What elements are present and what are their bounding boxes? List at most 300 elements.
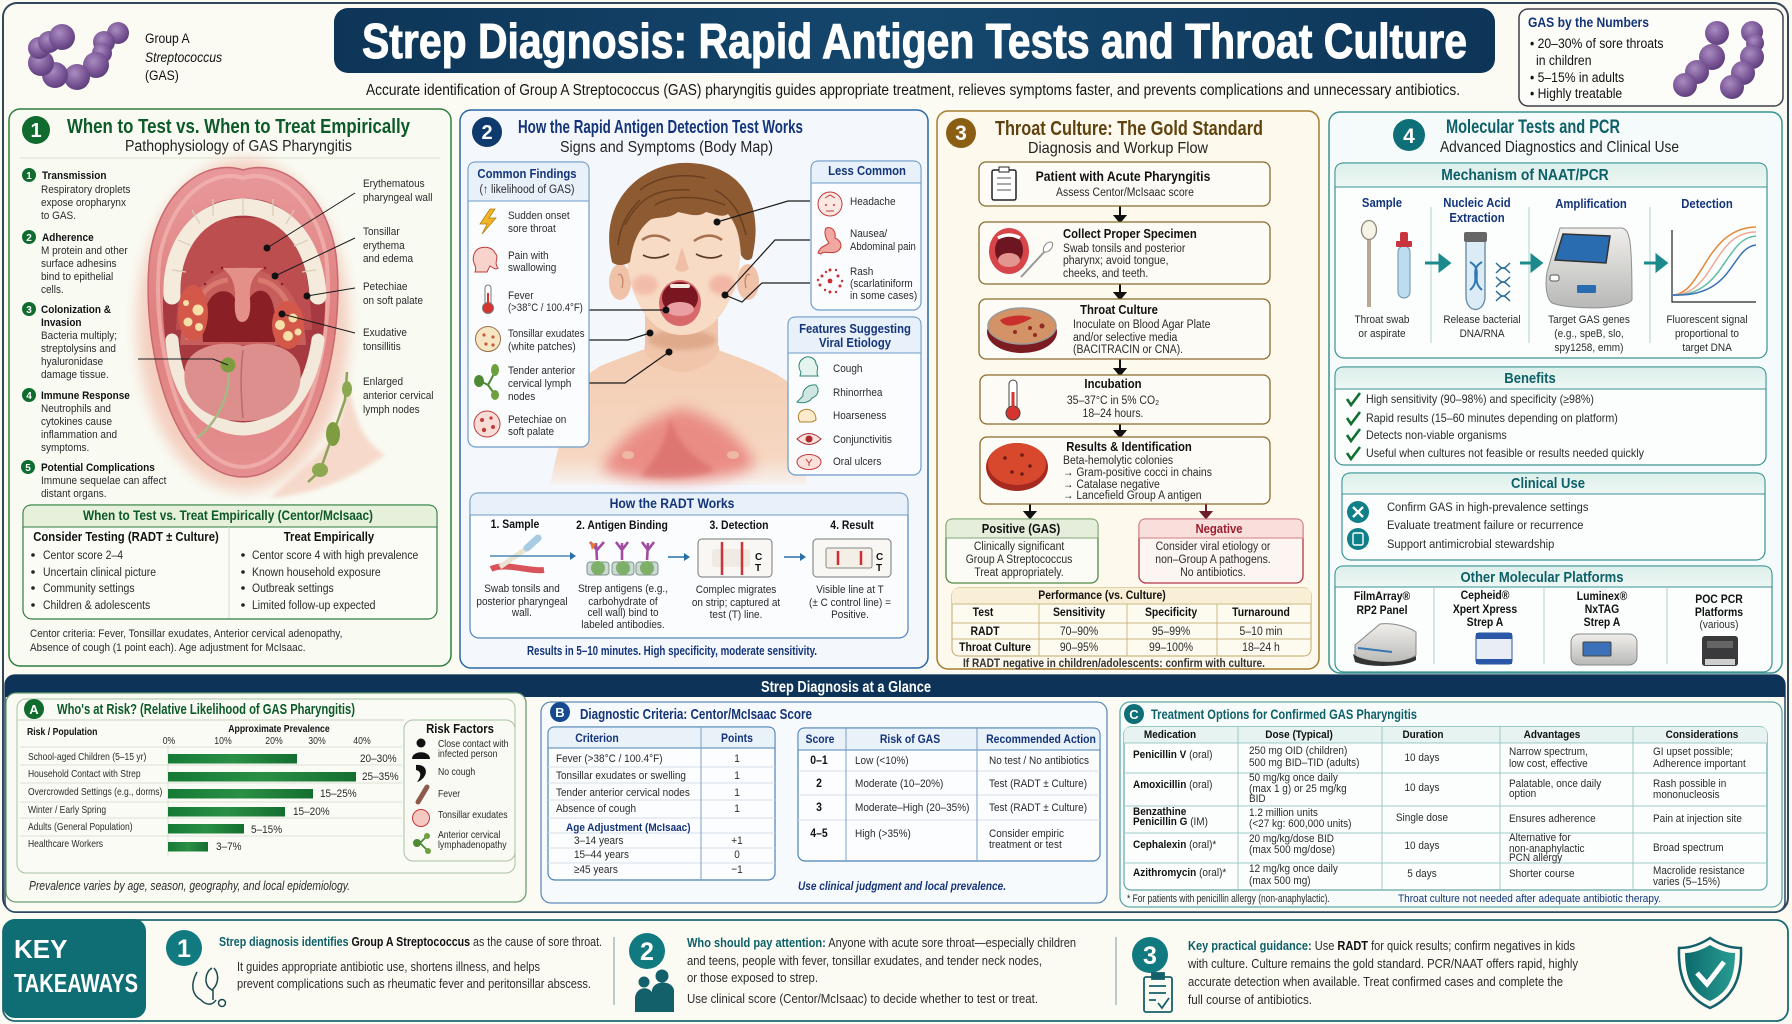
text: pathophysiology steps: 3 [26,305,32,316]
column headers: Detection [1681,196,1733,211]
flow step: specimen: Swab tonsils and posterior [1063,242,1186,255]
table: performance vs culture: Turnaround [1232,606,1290,619]
platform names: Cepheid® [1461,589,1510,602]
table: performance vs culture: 99–100% [1149,641,1193,654]
text: viral features list: Cough [833,362,862,375]
table: Centor criteria: Absence of cough [556,802,636,815]
text: step captions: posterior pharyngeal [476,595,568,608]
box: benefits: Benefits [1504,369,1556,386]
box: test vs treat: Community settings [43,582,135,595]
takeaway 1 [166,930,602,1006]
text: less common list: in some cases) [850,289,917,302]
text: pathophysiology steps: Adherence [42,231,94,244]
chart: prevalence bars: Adults (General Population) [28,821,133,832]
table: Centor criteria: 1 [734,802,740,815]
table: treatments: (<27 kg: 600,000 units) [1249,817,1351,830]
box: features suggesting viral etiology: Features Suggesting [799,321,911,336]
result box: negative: Negative [1195,521,1243,536]
text: common findings list: Sudden onset [508,209,570,222]
platform names: Platforms [1695,606,1743,619]
footnote: Centor criteria: Absence of cough (1 point each). Age adjustment for McIsaac. [30,641,306,654]
text: pathophysiology steps: Invasion [41,316,82,329]
panel 4 heading: Molecular Tests and PCR [1446,117,1620,138]
box: features suggesting viral etiology: Viral Etiology [819,335,891,350]
text: mechanism captions: Release bacterial [1443,313,1521,326]
platform names: (various) [1700,618,1738,631]
box: clinical use [1342,473,1765,560]
caption: results note: Results in 5–10 minutes. High specificity, moderate sensitivity. [527,643,817,658]
text: pathophysiology steps: Respiratory droplets [41,183,130,196]
chart: prevalence bars: 25–35% [362,770,399,783]
illustration: open mouth with pharyngitis [137,159,385,498]
panel 1: when to test vs treat [9,109,451,666]
text: step captions: Visible line at T [816,583,884,596]
result box: positive: Positive (GAS) [982,521,1060,536]
text: pathophysiology steps: Bacteria multiply; [41,329,117,342]
table: risk and action: 4–5 [810,827,828,840]
table: Centor criteria: 0 [734,848,740,861]
step headers [491,518,874,532]
box: test vs treat: Treat Empirically [284,529,374,544]
flow step: specimen [979,222,1270,284]
panel 2: rapid antigen detection test [460,110,928,668]
panel A heading [17,699,404,720]
text: less common list [850,195,917,302]
callout: GAS by the numbers: • Highly treatable [1530,85,1622,101]
box: features suggesting viral etiology [788,317,921,475]
takeaway 3 [1132,937,1578,1012]
text: risk factor list [438,738,509,850]
table: treatments: (max 1 g) or 25 mg/kg [1249,782,1347,795]
panel C heading: Treatment Options for Confirmed GAS Pharyngitis [1151,706,1417,722]
table: treatments: Shorter course [1509,867,1575,880]
step headers: 4. Result [830,519,874,532]
icon: POC device [1702,636,1738,666]
text: pathophysiology steps: 2 [26,233,32,244]
text: mechanism captions: Fluorescent signal [1666,313,1748,326]
table: treatments: non-anaphylactic [1509,842,1585,855]
table: performance vs culture [952,588,1311,656]
text: mechanism captions: target DNA [1682,341,1733,354]
panel 2 heading [472,117,803,156]
table: Centor criteria: −1 [731,863,743,876]
key takeaways badge: KEY [14,934,67,964]
callout: GAS by the numbers: GAS by the Numbers [1528,14,1649,30]
key takeaways strip [3,919,1788,1021]
box: clinical use: Evaluate treatment failure or recurrence [1387,520,1583,532]
box: common findings [468,162,589,447]
flow step: results: → Lancefield Group A antigen [1063,489,1202,502]
mouth labels: Enlarged [363,375,403,388]
icon: detection cassette: T [755,563,761,574]
platform names: RP2 Panel [1356,604,1408,617]
takeaway 3: accurate detection when available. Treat confirmed cases and complete the [1188,974,1563,989]
text: mechanism captions: DNA/RNA [1460,327,1505,340]
icon: petechiae [474,411,500,437]
table: risk and action: Recommended Action [986,733,1096,746]
box: clinical use: Confirm GAS in high-prevalence settings [1387,502,1589,514]
box: test vs treat: Children & adolescents [43,599,151,612]
table: treatments: Adherence important [1653,757,1746,770]
panel 4 heading: Advanced Diagnostics and Clinical Use [1440,139,1679,156]
text: risk factor list: Fever [438,788,460,799]
icon: person [412,738,430,759]
flow step: throat culture: Inoculate on Blood Agar Plate [1073,318,1210,331]
logo caption [145,30,223,83]
platform names: Strep A [1467,616,1503,629]
table: performance vs culture: RADT [971,625,1000,638]
text: risk factor list: Anterior cervical [438,829,500,840]
text: common findings list: Pain with [508,249,549,262]
chart: fluorescent amplification curves [1672,227,1756,302]
table: risk and action: Score [806,733,834,746]
illustration: child body map [550,163,810,485]
text: pathophysiology steps [21,168,166,500]
panel B heading: Diagnostic Criteria: Centor/McIsaac Score [580,706,812,723]
mouth labels: Tonsillar [363,225,400,238]
box: test vs treat [23,505,437,619]
callout: GAS by the numbers: • 20–30% of sore throats [1530,35,1664,51]
text: pathophysiology steps: bind to epithelial [41,270,113,283]
takeaway 2 [629,933,1076,1012]
icon: rash [817,268,843,294]
chart: prevalence bars: Approximate Prevalence [228,723,330,734]
footnote: penicillin allergy: * For patients with penicillin allergy (non-anaphylactic). [1127,893,1330,905]
key takeaways badge [3,919,146,1018]
flow step: throat culture: (BACITRACIN or CNA). [1073,343,1183,356]
panel 3: throat culture flow [937,111,1319,670]
table: risk and action: Moderate (10–20%) [855,777,943,790]
table: treatments: 20 mg/kg/dose BID [1249,832,1334,845]
text: common findings list: Tonsillar exudates [508,328,585,340]
text: step captions [476,582,891,631]
flow step: throat culture [979,299,1270,359]
flow step: throat culture: and/or selective media [1073,331,1178,344]
text: step captions: cell wall) bind to [587,606,659,619]
box: test vs treat: Consider Testing (RADT ± Culture) [33,529,219,544]
box: benefits [1335,367,1766,465]
takeaway 1: prevent complications such as rheumatic fever and peritonsillar abscess. [237,976,591,991]
flow step: results: Results & Identification [1066,439,1192,454]
table: performance vs culture: 18–24 h [1242,641,1280,654]
mouth labels: erythema [363,239,405,252]
flow step: incubation: Incubation [1084,376,1142,391]
mouth labels [363,177,434,416]
text: less common list: Abdominal pain [850,241,916,253]
table: treatments: PCN allergy [1509,851,1563,864]
icon: exudate [412,810,430,826]
text: common findings list: Fever [508,289,534,302]
logo: Group A Streptococcus chain [28,22,129,90]
box: benefits: Useful when cultures not feasible or results needed quickly [1366,448,1644,460]
icon: stomach [818,228,841,254]
table: treatments: 50 mg/kg once daily [1249,771,1338,784]
table: treatments: 1.2 million units [1249,806,1318,819]
text: risk factor list: lymphadenopathy [438,839,507,850]
text: pathophysiology steps: expose oropharynx [41,196,127,209]
box: less common [811,161,921,310]
text: viral features list: Oral ulcers [833,455,881,468]
panel 3 heading: Diagnosis and Workup Flow [1028,140,1208,157]
result box: positive [946,519,1098,583]
icon: lymph nodes small [413,833,431,854]
takeaway 1: Strep diagnosis identifies Group A Streptococcus as the cause of sore throat. [219,934,602,949]
table: performance vs culture: Specificity [1145,606,1198,619]
text: common findings list: swallowing [508,261,556,274]
table: performance vs culture: Throat Culture [959,641,1031,654]
icon: PCR machine [1546,228,1632,308]
text: mechanism captions: Throat swab [1355,313,1409,326]
text: common findings list: (white patches) [508,340,576,353]
table: treatments: Azithromycin (oral)* [1133,866,1227,879]
table: risk and action: No test / No antibiotics [989,754,1089,767]
takeaway 2: Use clinical score (Centor/McIsaac) to decide whether to test or treat. [687,991,1038,1006]
table: Centor criteria: +1 [731,834,743,847]
text: common findings list: (>38°C / 100.4°F) [508,302,583,314]
box: test vs treat: Known household exposure [252,566,381,579]
panel 2 heading: How the Rapid Antigen Detection Test Works [518,117,803,137]
text: pathophysiology steps: Colonization & [41,303,111,316]
text: pathophysiology steps: Immune Response [41,389,130,402]
table: Centor criteria: Tender anterior cervical nodes [556,786,690,799]
table: Centor criteria: 15–44 years [574,848,629,861]
table: risk and action [798,728,1100,861]
table: treatments: Single dose [1396,811,1448,824]
text: mechanism captions: spy1258, emm) [1555,341,1623,354]
note: throat culture: Throat culture not needed after adequate antibiotic therapy. [1398,893,1661,905]
mouth labels: on soft palate [363,294,423,307]
text: pathophysiology steps: Transmission [42,169,106,182]
table: treatments: varies (5–15%) [1653,875,1720,888]
flow step: throat culture: Throat Culture [1080,302,1158,317]
text: pathophysiology steps: distant organs. [41,487,107,500]
text: step captions: Complec migrates [696,583,776,596]
text: common findings list: cervical lymph [508,377,571,390]
text: common findings list: soft palate [508,425,554,438]
arrow [1520,256,1541,270]
table: risk and action: Test (RADT ± Culture) [989,801,1087,814]
table: treatments: Amoxicillin (oral) [1133,778,1212,791]
chart: prevalence bars: 3–7% [216,840,242,853]
icon: people [635,970,674,1012]
table: treatments [1124,727,1767,890]
panel 3 heading: Throat Culture: The Gold Standard [995,118,1263,140]
text: step captions: labeled antibodies. [581,618,665,631]
table: treatments: 12 mg/kg once daily [1249,862,1338,875]
box: risk factors: Risk Factors [426,721,494,736]
glance banner: Strep Diagnosis at a Glance [761,679,931,696]
icon: swab sampling [490,538,576,570]
icon: shield list [1347,528,1369,550]
text: step captions: Positive. [831,608,869,621]
box: common findings: (↑ likelihood of GAS) [479,183,575,196]
flow step: results: → Catalase negative [1063,478,1160,491]
icon: Luminex device [1571,634,1637,665]
flow step: patient [979,162,1270,206]
arrow [1425,256,1449,270]
table: Centor criteria: 1 [734,769,740,782]
flow step: specimen: pharynx; avoid tongue, [1063,254,1169,267]
box: how the RADT works: How the RADT Works [610,495,734,511]
table: risk and action: 3 [816,801,822,814]
text: mechanism captions [1355,313,1748,354]
text: pathophysiology steps: hyaluronidase [41,355,103,368]
box: benefits: Detects non-viable organisms [1366,430,1507,442]
text: common findings list: nodes [508,390,535,403]
table: risk and action: treatment or test [989,838,1062,851]
logo caption: Group A [145,30,190,46]
mouth labels: lymph nodes [363,403,420,416]
text: step captions: Swab tonsils and [484,582,560,595]
text: mechanism captions: (e.g., speB, slo, [1554,327,1624,340]
table: risk and action: Risk of GAS [880,733,941,746]
text: viral features list: Conjunctivitis [833,433,892,446]
box: mechanism of NAAT/PCR [1335,163,1767,358]
takeaway 3: Key practical guidance: Use RADT for quick results; confirm negatives in kids [1188,938,1575,953]
text: common findings list: Tender anterior [508,364,576,377]
takeaway 2: and teens, people with fever, tonsillar exudates, and tender neck nodes, [687,953,1042,968]
step headers: 1. Sample [491,518,539,531]
text: pathophysiology steps: streptolysins and [41,342,116,355]
panel C heading [1124,704,1417,724]
text: step captions: Strep antigens (e.g., [578,582,668,595]
text: step captions: carbohydrate of [588,595,658,608]
table: risk and action: 2 [816,777,822,790]
panel 4 heading: 4 [1403,125,1415,148]
box: common findings: Common Findings [477,166,577,181]
table: treatments: Benzathine [1133,805,1186,818]
mouth labels: anterior cervical [363,389,434,402]
note: prevalence: Prevalence varies by age, season, geography, and local epidemiology. [29,879,350,893]
flow step: results: Beta-hemolytic colonies [1063,454,1173,467]
platform names: POC PCR [1695,593,1743,606]
icon: head in pain [473,247,498,272]
table: risk and action: 0–1 [810,754,828,767]
result box: positive: Group A Streptococcus [966,553,1073,566]
mouth labels: Petechiae [363,280,407,293]
text: viral features list [833,362,892,468]
takeaway 3: full course of antibiotics. [1188,992,1312,1007]
icon: clipboard [1144,973,1172,1012]
chart: prevalence bars: 15–25% [320,787,357,800]
table: treatments: Rash possible in [1653,777,1726,790]
chart: prevalence bars: 15–20% [293,805,330,818]
table: treatments: 500 mg BID–TID (adults) [1249,756,1360,769]
icon: no cough [416,765,426,782]
takeaway 2: 2 [640,938,654,966]
glance banner [5,675,1785,697]
text: risk factor list: No cough [438,766,475,777]
text: risk factor list: infected person [438,748,497,759]
platform names: Xpert Xpress [1453,603,1517,616]
chart: prevalence bars: Healthcare Workers [28,838,103,849]
panel B: diagnostic criteria [541,702,1107,903]
chart: prevalence bars: School-aged Children (5–15 yr) [28,751,146,762]
chart: prevalence bars: 0% [163,735,175,746]
text: mechanism captions: or aspirate [1358,327,1406,340]
result box: negative: non–Group A pathogens. [1155,553,1271,566]
footnote: Centor criteria [30,627,342,654]
chart: prevalence bars: 20% [265,735,283,746]
mouth labels: pharyngeal wall [363,191,432,204]
step headers: 2. Antigen Binding [576,519,668,532]
table: Centor criteria: 3–14 years [574,834,623,847]
mouth labels: tonsillitis [363,340,401,353]
panel A heading: A [29,702,39,717]
takeaway 2: or those exposed to strep. [687,970,818,985]
takeaway 1: It guides appropriate antibiotic use, shortens illness, and helps [237,959,540,974]
table: Centor criteria: 1 [734,786,740,799]
takeaway 3: with culture. Culture remains the gold standard. PCR/NAAT offers rapid, highly [1187,956,1578,971]
text: pathophysiology steps: Immune sequelae can affect [41,474,166,487]
title banner: Strep Diagnosis: Rapid Antigen Tests and Throat Culture [362,15,1467,69]
chart: prevalence bars: 40% [353,735,371,746]
key takeaways badge: TAKEAWAYS [14,968,138,998]
table: Centor criteria: ≥45 years [574,863,618,876]
table: treatments: mononucleosis [1653,788,1720,801]
table: performance vs culture: 90–95% [1060,641,1098,654]
box: clinical use: Clinical Use [1511,474,1585,491]
table: risk and action: Moderate–High (20–35%) [855,801,969,814]
box: test vs treat: When to Test vs. Treat Empirically (Centor/McIsaac) [83,507,373,523]
chart: prevalence bars: 20–30% [360,752,397,765]
callout: GAS by the numbers: in children [1536,52,1591,68]
panel A: who's at risk [6,693,526,902]
flow step: specimen: Collect Proper Specimen [1063,226,1197,241]
table: performance vs culture: 5–10 min [1240,625,1282,638]
footnote: Centor criteria: Centor criteria: Fever, Tonsillar exudates, Anterior cervical adenopathy, [30,627,342,640]
text: step captions: test (T) line. [710,608,762,621]
table: treatments: Medication [1144,728,1196,741]
table: treatments: 10 days [1404,839,1440,852]
text: common findings list: sore throat [508,222,556,235]
text: common findings list [508,209,585,438]
panel 2 heading: Signs and Symptoms (Body Map) [560,139,773,156]
box: test vs treat: Outbreak settings [252,582,334,595]
table: risk and action: Low (<10%) [855,754,909,767]
panel A heading: Who's at Risk? (Relative Likelihood of GAS Pharyngitis) [57,701,355,718]
text: pathophysiology steps: Potential Complications [41,461,155,474]
box: how the RADT works [470,493,908,638]
table: treatments: Cephalexin (oral)* [1133,838,1217,851]
result box: negative: Consider viral etiology or [1156,540,1271,553]
box: other molecular platforms [1335,566,1772,672]
flow step: patient: Patient with Acute Pharyngitis [1036,168,1210,184]
step headers: 3. Detection [709,519,769,532]
table: treatments: Pain at injection site [1653,812,1742,825]
text: pathophysiology steps: Neutrophils and [41,402,111,415]
table: performance vs culture: Performance (vs. Culture) [1038,589,1166,602]
box: test vs treat: Uncertain clinical picture [43,566,156,579]
text: step captions: on strip; captured at [692,596,780,609]
table: Centor criteria: Points [721,732,753,745]
table: treatments: Broad spectrum [1653,841,1724,854]
table: treatments: Dose (Typical) [1265,728,1333,741]
text: pathophysiology steps: surface adhesins [41,257,117,270]
chart: prevalence bars: Household Contact with Strep [28,768,141,779]
text: risk factor list: Tonsillar exudates [438,809,508,820]
flow arrows [1025,206,1211,518]
text: mechanism captions: proportional to [1675,327,1739,340]
table: performance vs culture: Sensitivity [1053,606,1106,619]
table: performance vs culture: Test [973,606,994,619]
takeaway 2: Who should pay attention: Anyone with acute sore throat—especially children [687,935,1076,950]
column headers: Sample [1362,195,1402,210]
table: treatments: (max 500 mg/dose) [1249,843,1335,856]
icon: headache [818,192,842,216]
icon: exudates [476,326,500,352]
icon: antigen binding [587,542,690,575]
